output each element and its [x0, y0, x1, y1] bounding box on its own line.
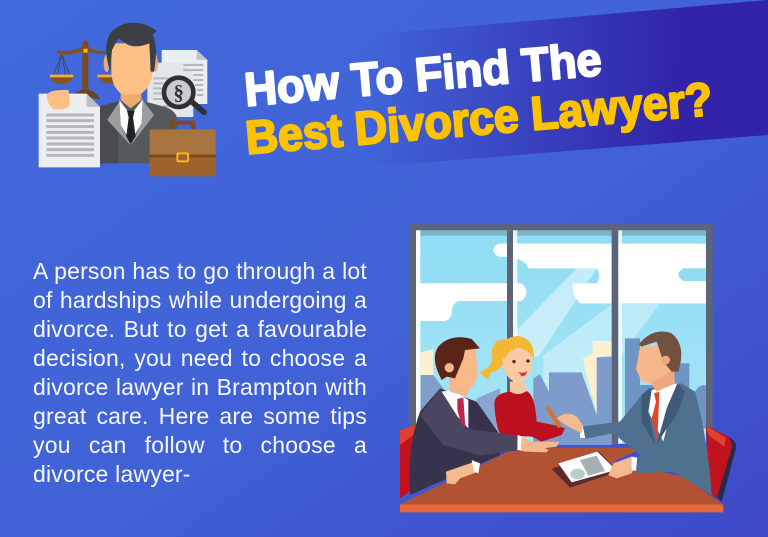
text block: introduction: divorce lawyer-	[33, 461, 191, 487]
woman	[480, 336, 565, 442]
title band	[230, 0, 768, 178]
sky notch in right pane	[678, 268, 706, 281]
title line 1: How To Find The	[242, 32, 604, 116]
table	[400, 448, 723, 512]
client forearms and hands	[446, 435, 559, 484]
title line 2: Best Divorce Lawyer?	[243, 72, 714, 164]
chairs	[400, 425, 736, 502]
illustration: meeting with a lawyer	[400, 224, 736, 512]
icon: lawyer with scales, documents and briefcase	[39, 23, 216, 176]
text block: introduction: you can follow to choose a	[33, 432, 367, 458]
text block: introduction: divorce. But to get a favourable	[33, 316, 367, 342]
man lawyer	[546, 332, 712, 495]
icon: lawyer head	[104, 23, 158, 108]
icon: lawyer suit	[100, 99, 177, 163]
text block: introduction	[33, 258, 367, 487]
text block: introduction: divorce lawyer in Brampton with	[33, 374, 367, 400]
text block: introduction: A person has to go through a lot	[33, 258, 367, 284]
window	[409, 224, 713, 445]
icon: back documents	[147, 50, 207, 117]
icon: scales of justice	[50, 41, 113, 99]
icon: briefcase	[150, 123, 216, 176]
text block: introduction: great care. Here are some tips	[33, 403, 367, 429]
clipboard with document	[552, 451, 618, 488]
icon: magnifier	[164, 78, 204, 112]
text block: introduction: of hardships while undergoing a	[33, 287, 367, 313]
skyline	[421, 338, 706, 445]
text block: introduction: decision, you need to choose a	[33, 345, 367, 371]
man client	[409, 337, 519, 495]
icon: document held in hand	[39, 90, 100, 167]
title	[242, 32, 714, 164]
clouds	[420, 244, 706, 321]
icon: magnifier: §	[174, 82, 184, 104]
window mullions	[507, 230, 513, 444]
glass reflection	[515, 268, 597, 368]
